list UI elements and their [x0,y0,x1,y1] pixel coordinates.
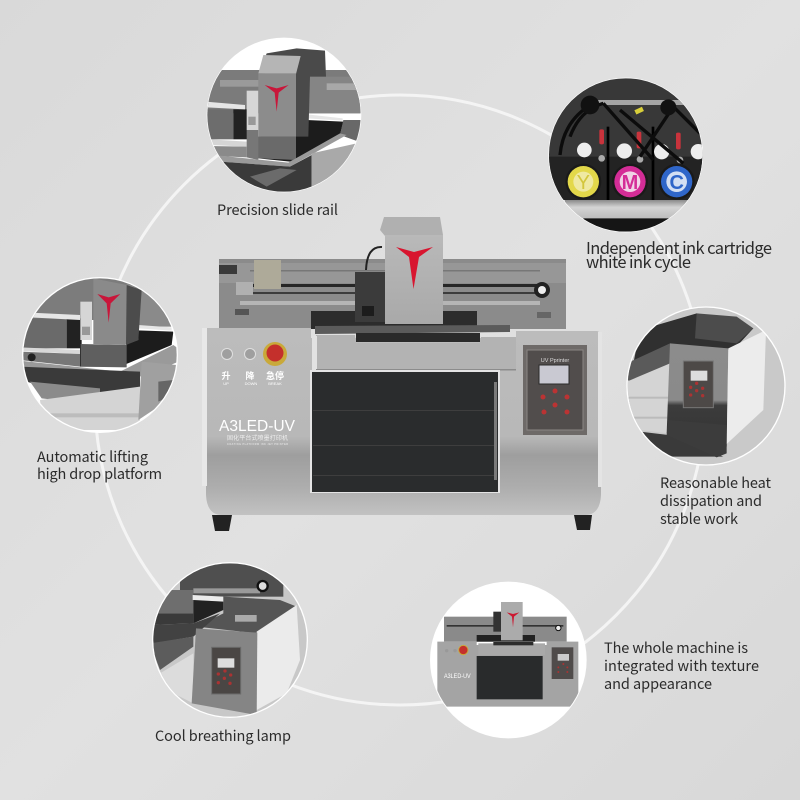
label: independent ink cartridge: Independent ink cartridge [586,235,772,259]
buttons [221,342,287,386]
label: automatic lifting: high drop platform [37,463,162,484]
control panel: UV Pprinter [541,358,569,364]
model name: COATING PLATFORM INK JET PRINTER [227,443,288,446]
model name [219,418,295,446]
cap Y [565,164,601,200]
detail circle: whole machine [430,582,587,738]
label: heat dissipation: stable work [660,508,738,529]
label: cool breathing lamp: Cool breathing lamp [155,725,291,746]
detail circle: precision slide rail [200,38,363,193]
label: whole machine: integrated with texture [604,655,759,676]
label: whole machine: and appearance [604,673,712,694]
red T logo [396,247,433,289]
feet [212,515,592,531]
label: independent ink cartridge [586,235,772,273]
connecting ring [95,95,705,705]
label: heat dissipation: dissipation and [660,490,762,511]
cap Y: Y [577,172,590,194]
printer main body [206,328,601,515]
print head carriage [380,217,443,324]
platform bar [312,325,516,370]
control panel [523,345,587,435]
buttons: BREAK [268,381,282,386]
model name: A3LED-UV [219,418,295,435]
detail circle: breathing lamp [152,562,308,718]
buttons: DOWN [245,381,257,386]
label: automatic lifting: Automatic lifting [37,446,148,467]
label: whole machine: The whole machine is [604,637,748,658]
label: heat dissipation: Reasonable heat [660,472,772,493]
buttons: 升 [221,370,231,381]
cap C [659,164,695,200]
label: whole machine [604,637,759,694]
label: heat dissipation [660,472,772,529]
cap C: C [669,172,684,194]
detail circle: ink cartridges [548,78,703,232]
buttons: 急停 [266,370,284,381]
detail circle: heat dissipation [626,306,786,466]
black media tray [310,370,500,493]
label: precision slide rail: Precision slide rail [217,199,338,220]
printer rail assembly [219,247,566,329]
buttons: UP [223,381,229,386]
detail circle: whole machine: A3LED-UV [444,674,471,680]
detail circle: lifting platform [22,277,178,433]
cap M: M [622,172,638,194]
cap M [612,164,648,200]
model name: 固化平台式喷墨打印机 [227,434,288,442]
label: automatic lifting [37,446,162,484]
buttons: 降 [245,370,255,381]
main printer [202,217,602,531]
label: independent ink cartridge: white ink cycle [586,249,691,273]
